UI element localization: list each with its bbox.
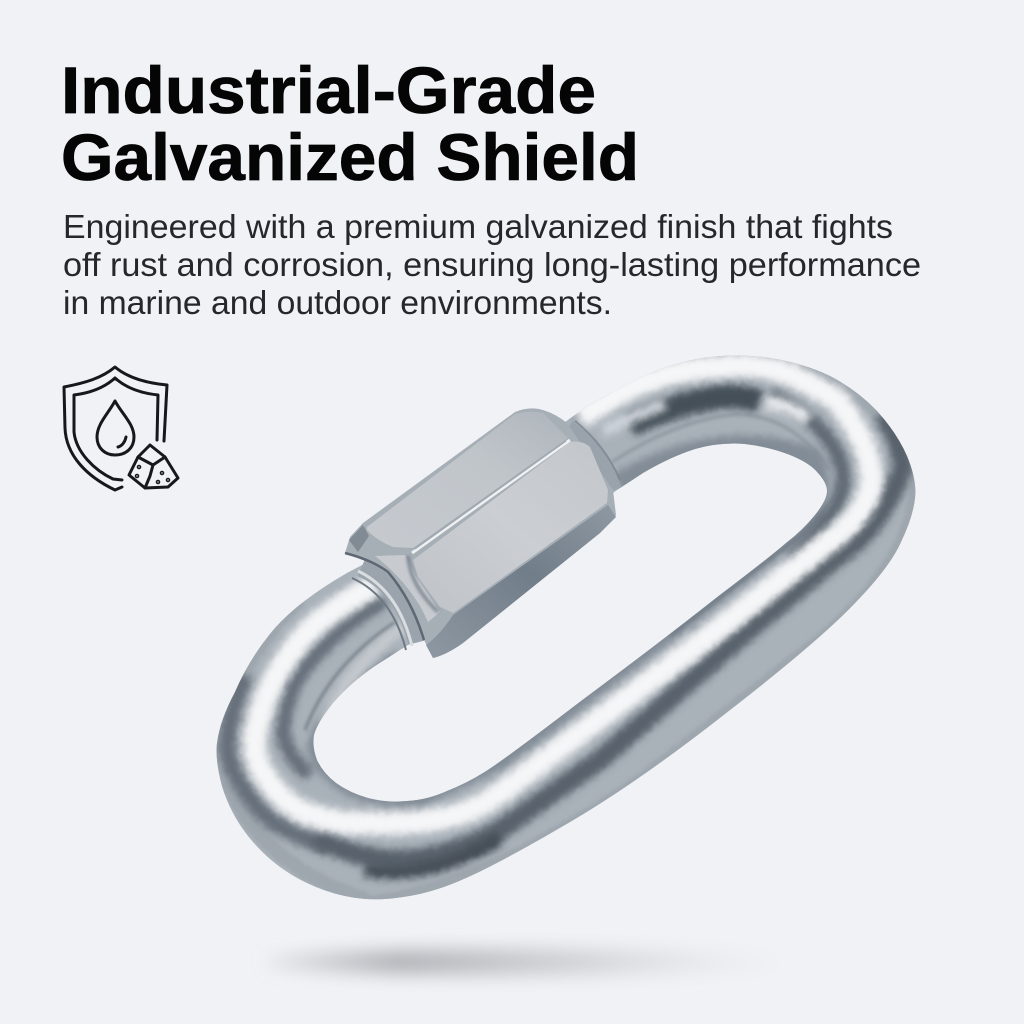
thin inner groove xyxy=(305,622,395,730)
nut body xyxy=(345,408,616,658)
nut front face xyxy=(413,442,608,613)
outer rim shade xyxy=(217,353,917,902)
quick link carabiner xyxy=(200,340,930,910)
dark reflection xyxy=(283,600,385,775)
description text: Engineered with a premium galvanized finish that fights xyxy=(63,208,893,245)
description text: off rust and corrosion, ensuring long-lasting performance xyxy=(63,246,921,283)
description text xyxy=(63,208,921,321)
inner surface light xyxy=(325,625,405,725)
nut ridge highlight xyxy=(412,440,570,553)
title xyxy=(61,53,639,194)
galvanized steel ring xyxy=(200,340,930,910)
shadow under carabiner xyxy=(265,949,795,975)
nut top face xyxy=(367,412,568,548)
icon: shield with water drop and rock xyxy=(64,367,178,490)
title: Industrial-Grade xyxy=(61,53,596,127)
description text: in marine and outdoor environments. xyxy=(63,284,612,321)
nut lower face xyxy=(426,505,616,658)
inner highlight patch xyxy=(765,402,808,420)
title: Galvanized Shield xyxy=(61,120,639,194)
collar right xyxy=(568,428,614,490)
bright highlight xyxy=(255,365,871,824)
collar left xyxy=(362,566,419,642)
inner rim shade xyxy=(318,446,818,796)
nut left bevel xyxy=(349,525,369,552)
